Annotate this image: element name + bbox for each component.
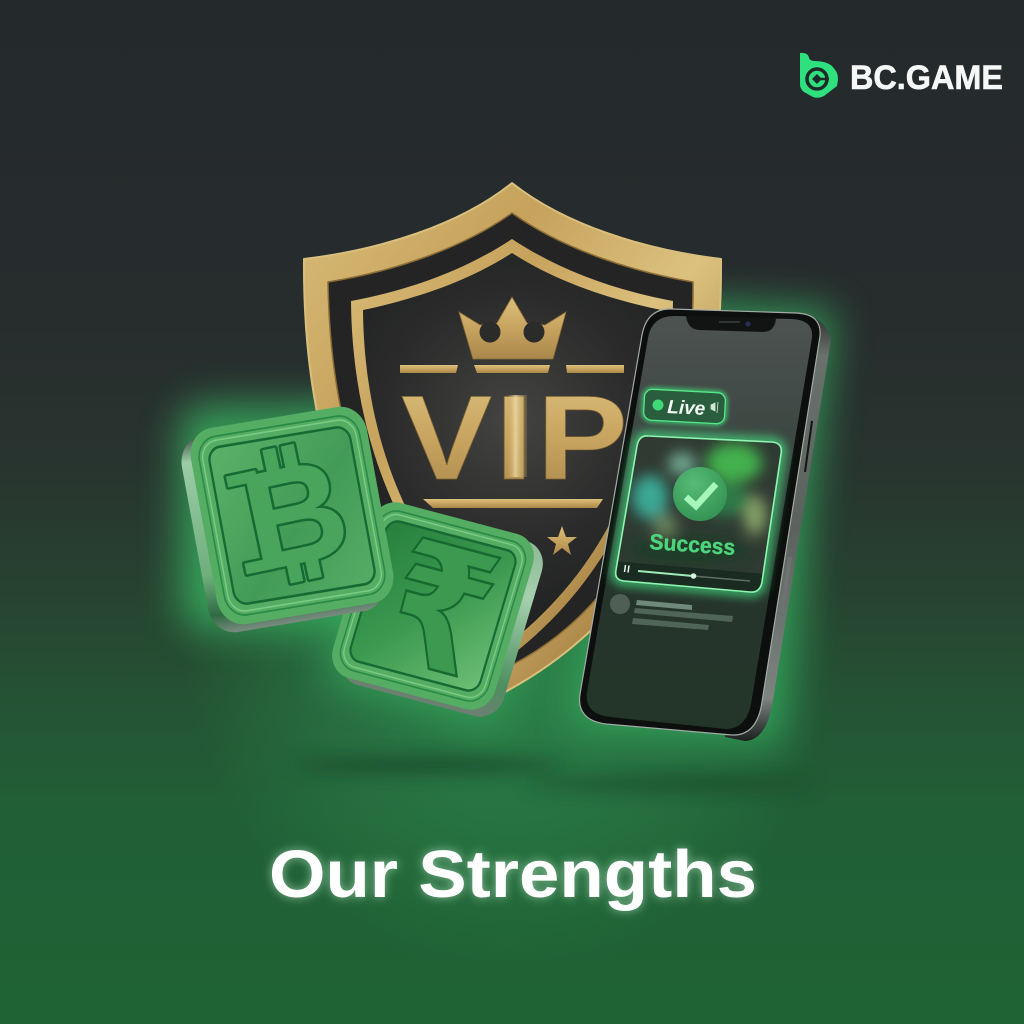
coin side	[335, 504, 549, 722]
coin face	[186, 403, 398, 628]
bitcoin coin	[177, 403, 398, 636]
rupee coin	[326, 497, 549, 722]
phone	[580, 309, 831, 741]
success label: Success	[649, 529, 736, 560]
title: Our Strengths	[269, 837, 757, 912]
check badge icon	[673, 467, 727, 521]
coin glow	[180, 405, 545, 725]
phone front bezel	[580, 309, 820, 735]
shield outer gold frame	[304, 183, 721, 692]
decorative bars beneath crown	[400, 365, 624, 373]
live badge: Live	[667, 397, 706, 420]
title: Our Strengths	[269, 837, 757, 912]
highlight on letter I	[506, 395, 527, 477]
star icon	[547, 526, 577, 555]
crown icon	[459, 297, 566, 359]
phone metal side	[725, 313, 831, 741]
icon: BC.GAME leaf mark	[800, 53, 838, 98]
logo: BC.GAME	[800, 53, 1003, 98]
bitcoin symbol: B	[230, 427, 361, 602]
shield inner gold band	[351, 239, 673, 655]
VIP lettering: VIP	[401, 372, 628, 505]
brand wordmark: BC.GAME	[850, 59, 1003, 97]
rupee symbol: ₹	[367, 502, 515, 721]
shield center panel	[363, 253, 661, 641]
phone glow	[570, 300, 835, 745]
live badge	[643, 389, 726, 424]
shield with VIP emblem	[304, 183, 721, 692]
ground shadows	[295, 756, 815, 792]
side buttons	[782, 421, 812, 613]
phone screen	[587, 316, 812, 729]
shield dark inner field	[328, 213, 693, 665]
player progress bar	[624, 565, 750, 581]
coin face	[326, 497, 540, 715]
notch	[686, 316, 776, 332]
blurred video thumbnail	[616, 436, 780, 592]
comment placeholder	[610, 594, 733, 630]
bar under VIP	[423, 499, 603, 508]
coin side	[177, 411, 389, 636]
video success card	[600, 430, 800, 600]
bitcoin symbol: B	[230, 427, 361, 602]
